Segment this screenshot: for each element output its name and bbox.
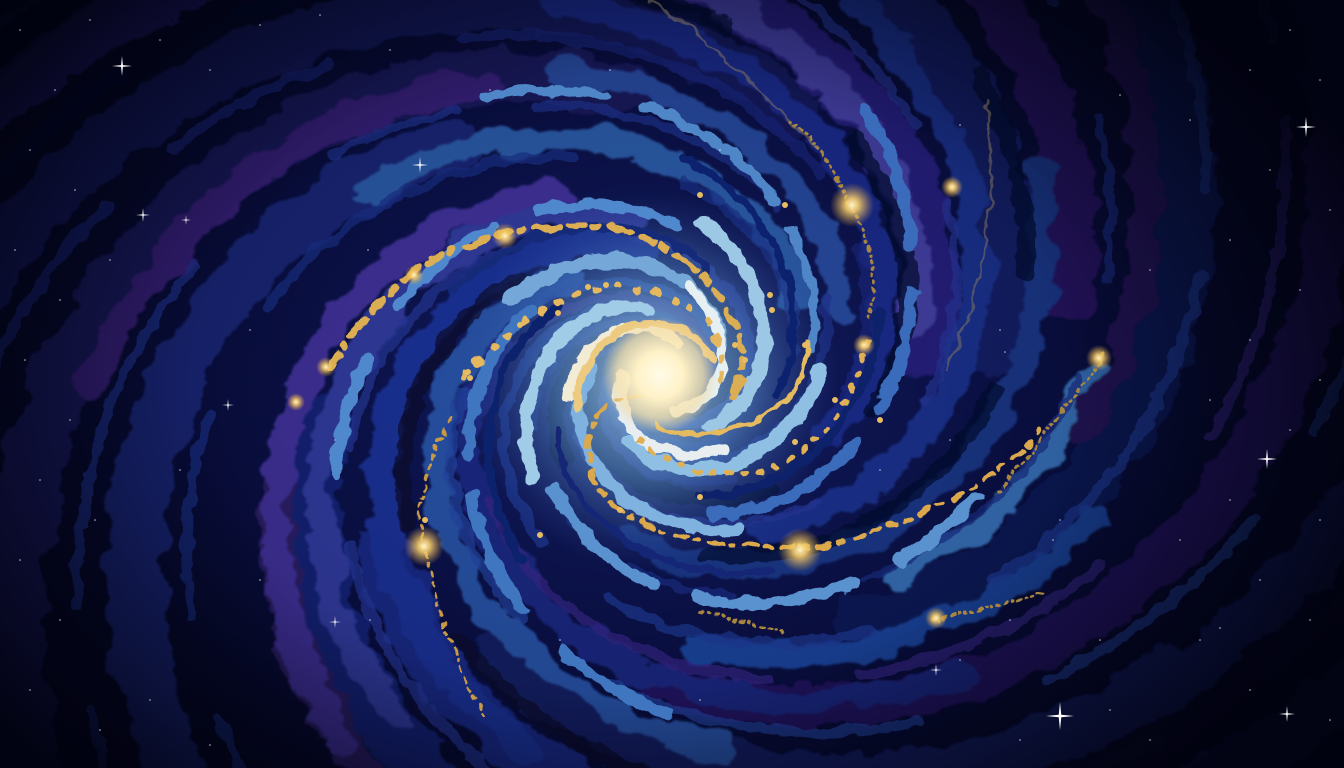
gold arm: inner lower arc: [655, 340, 808, 434]
gold dust trails: [700, 120, 1105, 635]
tan streaks: upper right: [650, 0, 991, 370]
gold star knots: [287, 176, 1112, 629]
gold arm: lower long arc: [587, 395, 1040, 548]
gold trail: lower left: [420, 420, 485, 715]
galactic core: [602, 317, 718, 433]
gold arm: inner arc: [465, 287, 723, 395]
gold arm: lower right arc: [640, 340, 868, 475]
gold arm: core arc: [578, 324, 712, 410]
sparkle stars: [112, 56, 1316, 730]
gold spiral arms: [330, 0, 1105, 715]
gold arm: upper arc: [330, 226, 742, 395]
gold dots along the arms: [425, 195, 880, 535]
